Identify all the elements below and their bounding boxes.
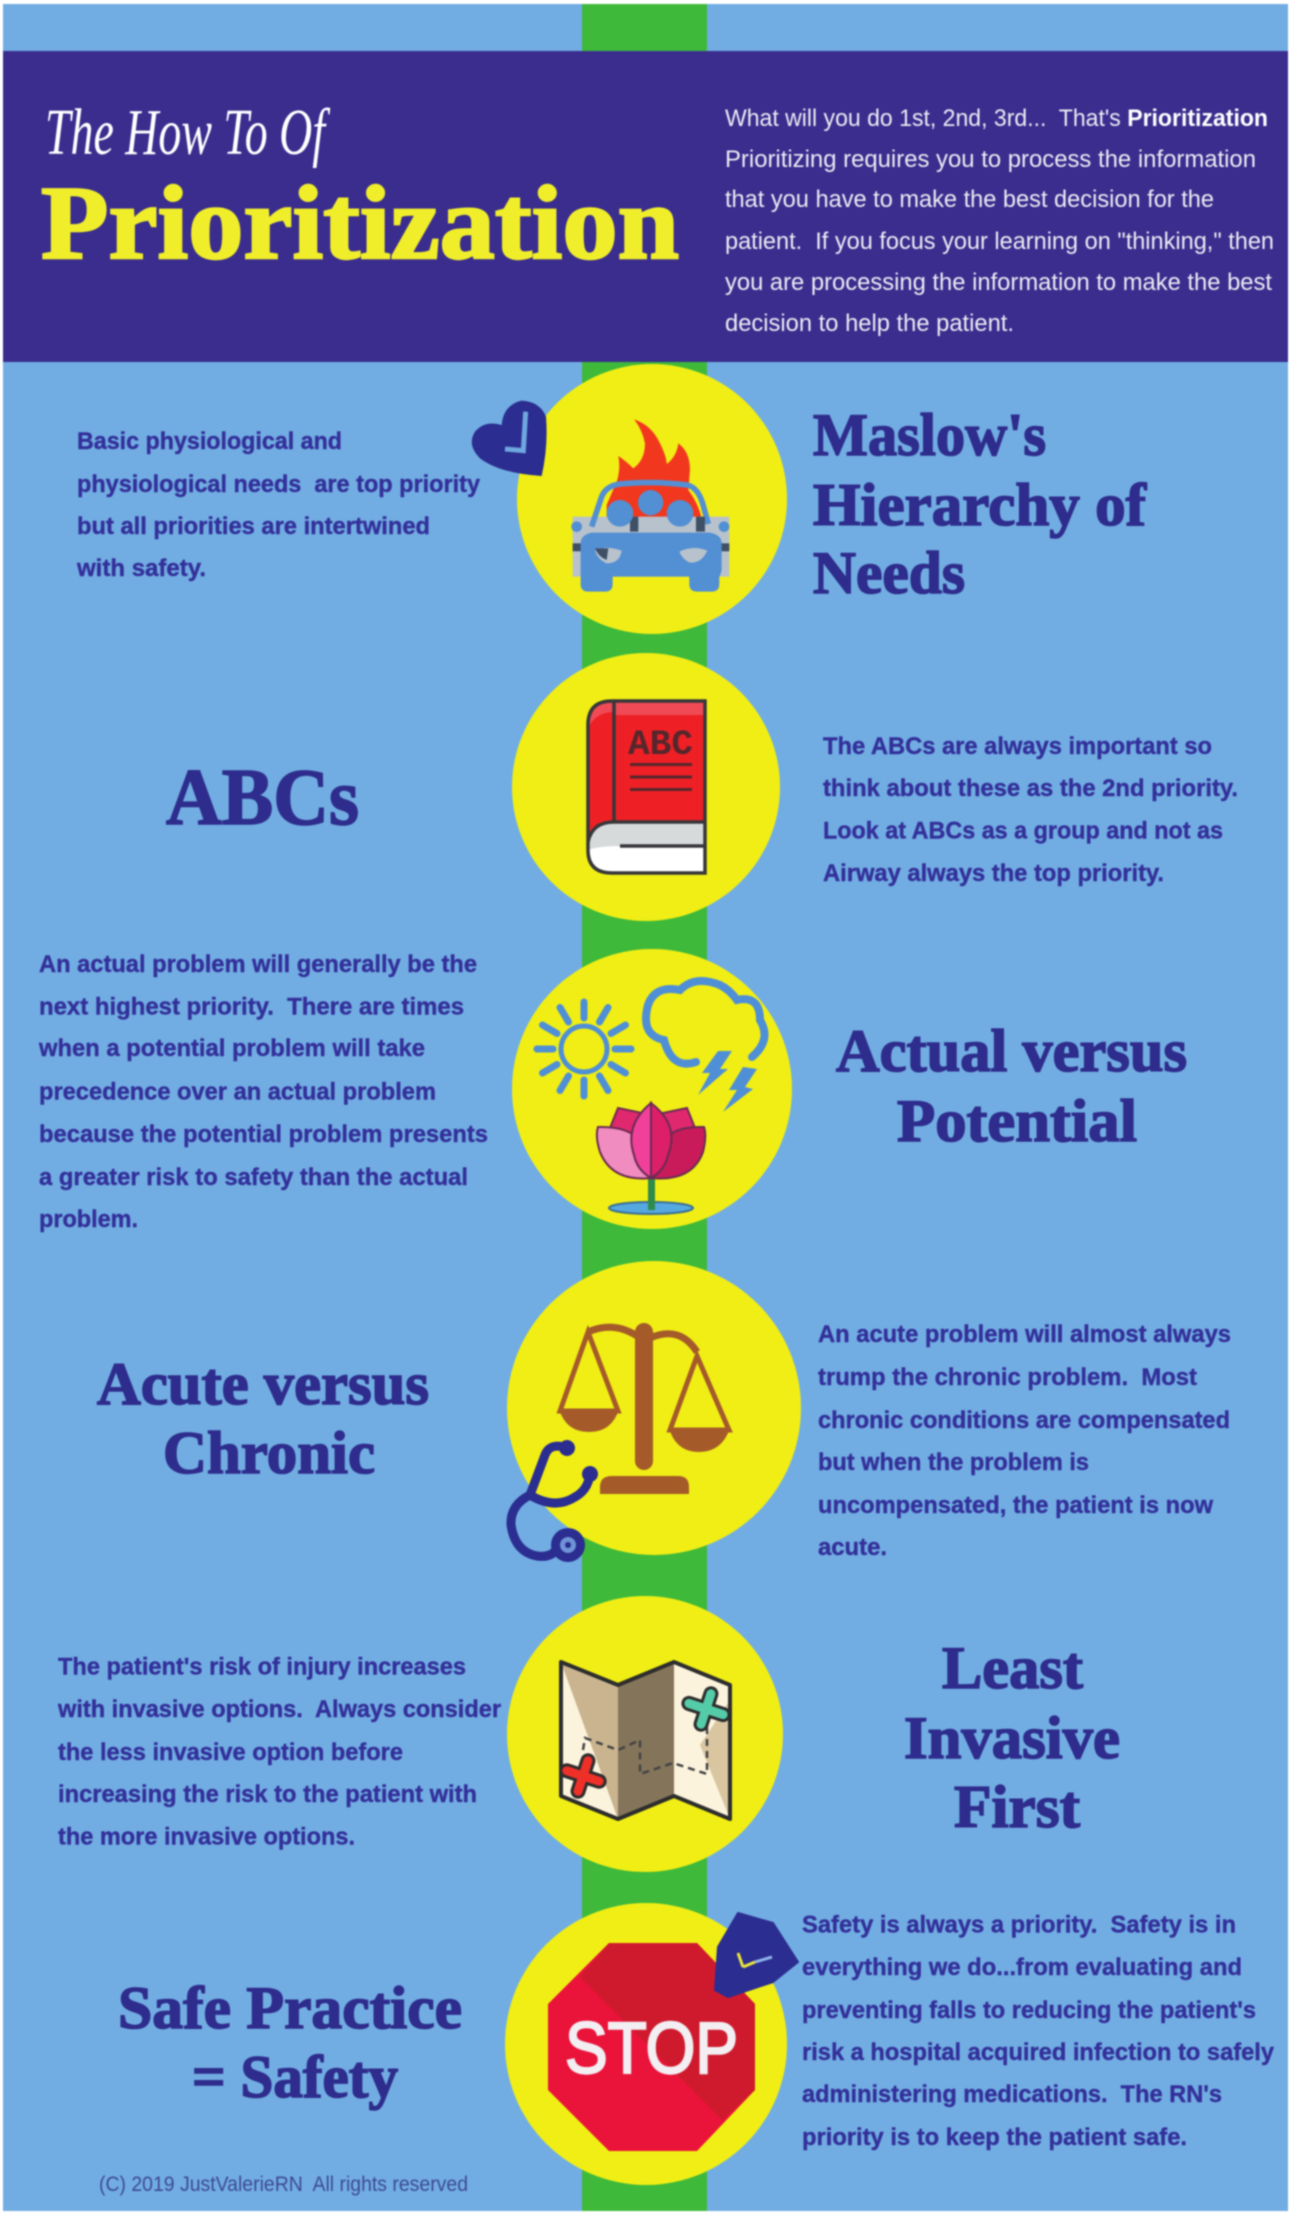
heading: Acute versus Chronic [97,1351,429,1486]
icon: lotus [597,1103,705,1214]
text: least invasive description: the more invasive options. [58,1824,355,1850]
heading: Safe Practice = Safety: Safe Practice [118,1975,462,2041]
text: safety description: preventing falls to reducing the patient's [802,1997,1256,2024]
central green stripe [582,4,707,2211]
intro paragraph: you are processing the information to make the best [725,269,1272,296]
heading: Least Invasive First: First [954,1774,1080,1840]
icon: heart with check [472,401,547,476]
intro paragraph: that you have to make the best decision for the [725,186,1214,213]
text: safety description: priority is to keep the patient safe. [802,2124,1187,2151]
intro paragraph: Prioritizing requires you to process the information [725,146,1256,173]
heading: ABCs: ABCs [166,754,359,842]
heading: Maslow's Hierarchy of Needs: Hierarchy of [813,472,1147,538]
intro paragraph [725,105,1274,337]
text: actual problem description: problem. [39,1206,138,1233]
text: acute problem description: but when the problem is [818,1449,1089,1476]
heading: Actual versus Potential: Potential [897,1088,1137,1154]
copyright footer: (C) 2019 JustValerieRN All rights reserved [99,2173,468,2196]
text: actual problem description: precedence over an actual problem [39,1078,436,1106]
icon: burning car [571,419,729,592]
text: least invasive description: with invasive options. Always consider [57,1696,501,1723]
heading: Maslow's Hierarchy of Needs [813,402,1147,606]
main title: Prioritization [41,164,679,281]
text: acute problem description: An acute problem will almost always [818,1321,1231,1348]
section 3: circle [512,949,792,1229]
text: actual problem description: next highest priority. There are times [39,994,464,1020]
section 2: circle [512,653,780,921]
text: safety description: everything we do...from evaluating and [802,1954,1242,1981]
text: acute problem description [818,1321,1231,1561]
icon: storm cloud [646,981,764,1112]
heading: Maslow's Hierarchy of Needs: Needs [813,540,965,606]
text: Maslow description: but all priorities are intertwined [77,513,430,540]
text: Maslow description: Basic physiological and [77,428,342,455]
heading: Least Invasive First: Least [942,1635,1083,1701]
icon: stop sign [548,1943,755,2151]
text: safety description: risk a hospital acquired infection to safely [802,2039,1275,2066]
text: Maslow description: physiological needs are top priority [77,471,481,498]
intro paragraph: What will you do 1st, 2nd, 3rd... That's Prioritization [725,105,1268,132]
icon: stop sign: STOP [565,2009,738,2089]
text: ABCs description: Airway always the top priority. [823,860,1164,887]
icon: balance scale [559,1323,730,1494]
section 6: circle [505,1903,787,2185]
heading: Least Invasive First [904,1635,1120,1840]
icon: ABC book: ABC [628,725,693,765]
text: least invasive description [57,1654,501,1850]
text: ABCs description [823,733,1238,887]
icon: ABC book [588,701,705,873]
text: Maslow description: with safety. [76,555,206,582]
text: actual problem description: because the potential problem presents [39,1121,488,1148]
text: acute problem description: acute. [818,1534,887,1561]
heading: Acute versus Chronic: Acute versus [97,1351,429,1417]
heading: Actual versus Potential [836,1018,1187,1154]
heading: Safe Practice = Safety: = Safety [192,2044,398,2110]
text: least invasive description: increasing the risk to the patient with [58,1781,477,1808]
text: ABCs description: think about these as the 2nd priority. [823,775,1238,802]
section 1: circle [517,364,787,634]
text: actual problem description [38,951,488,1233]
heading: Actual versus Potential: Actual versus [836,1018,1187,1084]
heading: Acute versus Chronic: Chronic [163,1420,375,1486]
heading: Safe Practice = Safety [118,1975,462,2110]
text: actual problem description: a greater risk to safety than the actual [39,1164,468,1191]
icon: sun [537,1002,631,1096]
icon: shield with check [715,1913,798,1997]
section 5: circle [507,1596,783,1872]
text: safety description: administering medications. The RN's [802,2081,1222,2108]
text: actual problem description: An actual problem will generally be the [39,951,477,978]
heading: Least Invasive First: Invasive [904,1705,1120,1771]
text: safety description [802,1912,1275,2151]
script title line: The How To Of [45,96,330,169]
text: Maslow description [76,428,481,582]
text: ABCs description: Look at ABCs as a group and not as [823,818,1223,844]
text: least invasive description: The patient's risk of injury increases [58,1654,466,1680]
icon: folded map [561,1662,730,1819]
text: ABCs description: The ABCs are always important so [823,733,1212,760]
text: acute problem description: trump the chronic problem. Most [818,1364,1197,1391]
text: least invasive description: the less invasive option before [58,1739,403,1766]
text: acute problem description: uncompensated, the patient is now [818,1492,1213,1519]
section 4: circle [507,1261,801,1555]
intro paragraph: patient. If you focus your learning on "thinking," then [725,228,1274,255]
text: acute problem description: chronic conditions are compensated [818,1407,1230,1434]
text: actual problem description: when a potential problem will take [38,1035,425,1062]
header panel [3,51,1288,362]
intro paragraph: decision to help the patient. [725,310,1014,337]
text: safety description: Safety is always a priority. Safety is in [802,1912,1236,1938]
icon: stethoscope [511,1440,598,1562]
heading: Maslow's Hierarchy of Needs: Maslow's [813,402,1046,468]
